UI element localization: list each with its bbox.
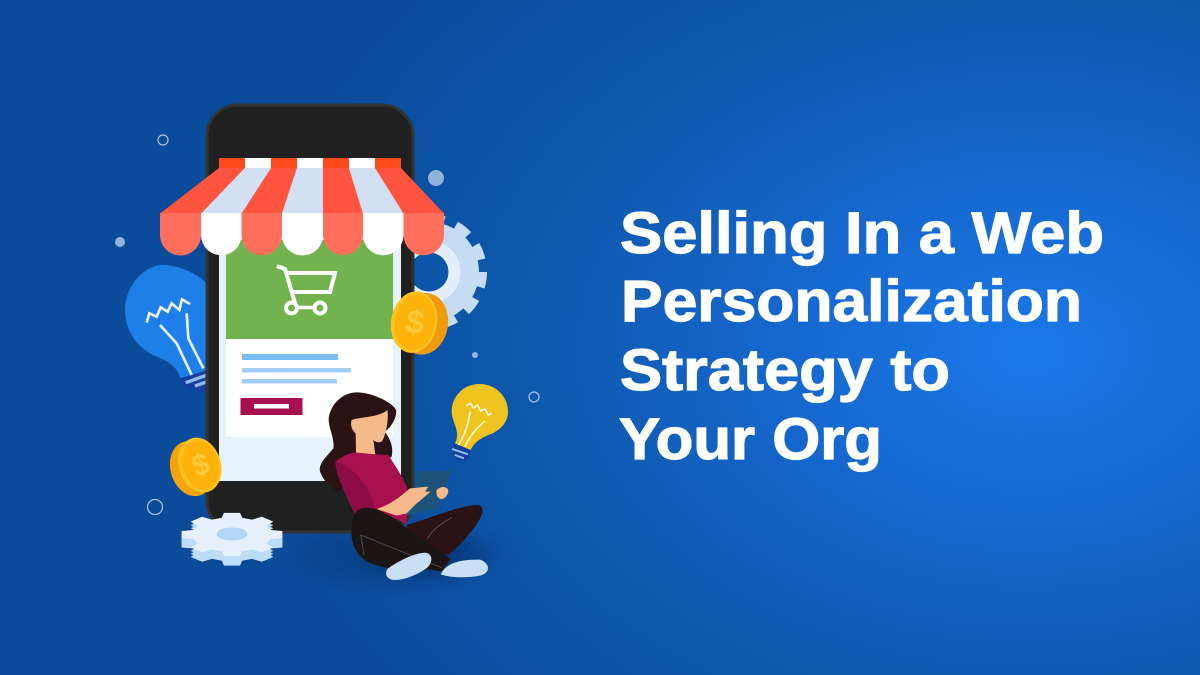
right shoe	[441, 560, 488, 577]
icon: lower coin	[163, 432, 228, 502]
text lines	[242, 354, 351, 384]
icon: upper coin: $	[403, 302, 427, 342]
title	[619, 201, 1104, 472]
near leg	[351, 508, 451, 572]
phone	[207, 105, 413, 532]
awning scallops	[160, 213, 444, 255]
icon: isometric gear	[182, 513, 282, 566]
title: Selling In a Web	[620, 201, 1104, 266]
decorative bubbles	[115, 135, 539, 514]
title: Your Org	[619, 407, 882, 472]
arm and hands	[377, 487, 448, 516]
hair	[320, 392, 396, 492]
icon: shopping cart	[277, 266, 335, 314]
icon: lower coin: $	[188, 447, 214, 484]
tablet	[401, 471, 452, 517]
icon: yellow light bulb	[451, 384, 508, 461]
awning top band	[219, 158, 401, 169]
ground shadow	[280, 513, 520, 597]
awning	[160, 158, 444, 255]
shirt shadow	[335, 462, 375, 514]
button	[240, 398, 302, 415]
title: Strategy to	[620, 338, 950, 403]
woman shadow	[360, 527, 500, 583]
shirt	[335, 452, 407, 524]
phone screen	[219, 160, 401, 481]
woman with tablet	[320, 392, 500, 583]
title: Personalization	[621, 269, 1082, 334]
icon: upper coin	[386, 288, 453, 359]
green banner	[226, 240, 393, 339]
face and neck	[351, 410, 388, 455]
icon: blue light bulb	[125, 265, 207, 393]
left shoe	[386, 553, 431, 580]
icon: gear behind phone	[377, 220, 481, 324]
awning slanted stripes	[160, 168, 444, 214]
far leg	[407, 505, 483, 555]
